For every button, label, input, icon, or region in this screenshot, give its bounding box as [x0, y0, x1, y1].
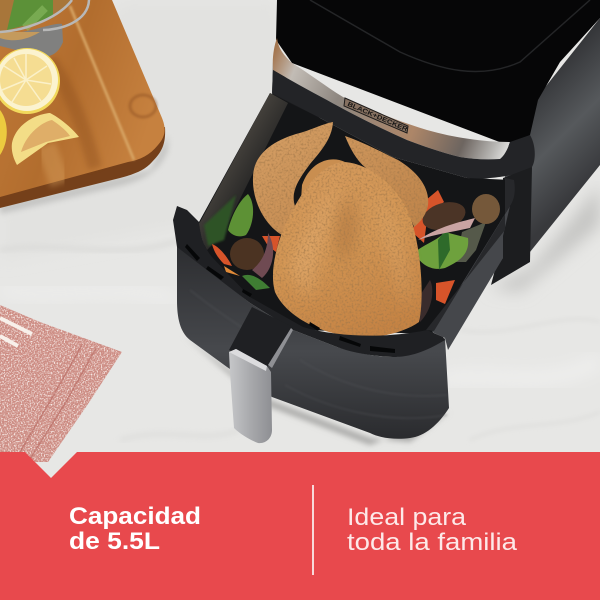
chrome band [273, 38, 510, 159]
lid highlights [310, 0, 590, 71]
chicken breast [273, 162, 422, 337]
basket handle [229, 307, 293, 443]
red banner [0, 452, 600, 600]
left statement: Capacidad [69, 503, 201, 530]
chicken legs [253, 122, 428, 235]
black front and top [276, 0, 600, 146]
red onion slices [252, 218, 475, 322]
grey green leaf [456, 222, 486, 262]
dark handle arm [229, 307, 293, 368]
wood grain [46, 6, 156, 184]
basket right wall [432, 206, 510, 350]
carrot pieces [212, 190, 455, 304]
lemon edge [0, 110, 7, 155]
board shadow [0, 135, 168, 214]
brand plate [344, 98, 409, 133]
lemon wedge [12, 113, 79, 165]
interior left wall [199, 93, 288, 250]
dark stub below band [272, 62, 320, 118]
left statement: de 5.5L [69, 528, 160, 555]
basket front wall [177, 245, 449, 445]
air fryer main body [272, 0, 600, 292]
metal bowl with brussels sprout [0, 0, 89, 56]
board thickness [0, 127, 165, 208]
back piece [300, 159, 345, 215]
shadow below basket [183, 335, 449, 445]
rim vent slots [185, 244, 395, 353]
right statement: Ideal para [347, 504, 467, 531]
grey side panel [505, 18, 600, 262]
roasted chestnuts and potato [230, 194, 500, 270]
brand plate: BLACK+DECKER [346, 101, 409, 133]
rear slot of the housing [491, 167, 532, 285]
kitchen towel [0, 305, 122, 462]
vegetables [212, 190, 500, 322]
basket rim [173, 178, 515, 357]
right rim [426, 178, 515, 331]
left and front rim [173, 206, 445, 357]
brushed metal grip [229, 349, 272, 443]
lemon half [0, 48, 60, 114]
basket interior [199, 93, 513, 334]
roast chicken [250, 120, 432, 340]
right statement: toda la familia [347, 529, 518, 556]
brussels sprouts [228, 194, 468, 290]
cutting board with lemons [0, 0, 168, 214]
board top face [0, 0, 165, 197]
divider [312, 485, 314, 575]
shadow under the unit [490, 185, 600, 292]
lower lip of the body [272, 70, 535, 179]
